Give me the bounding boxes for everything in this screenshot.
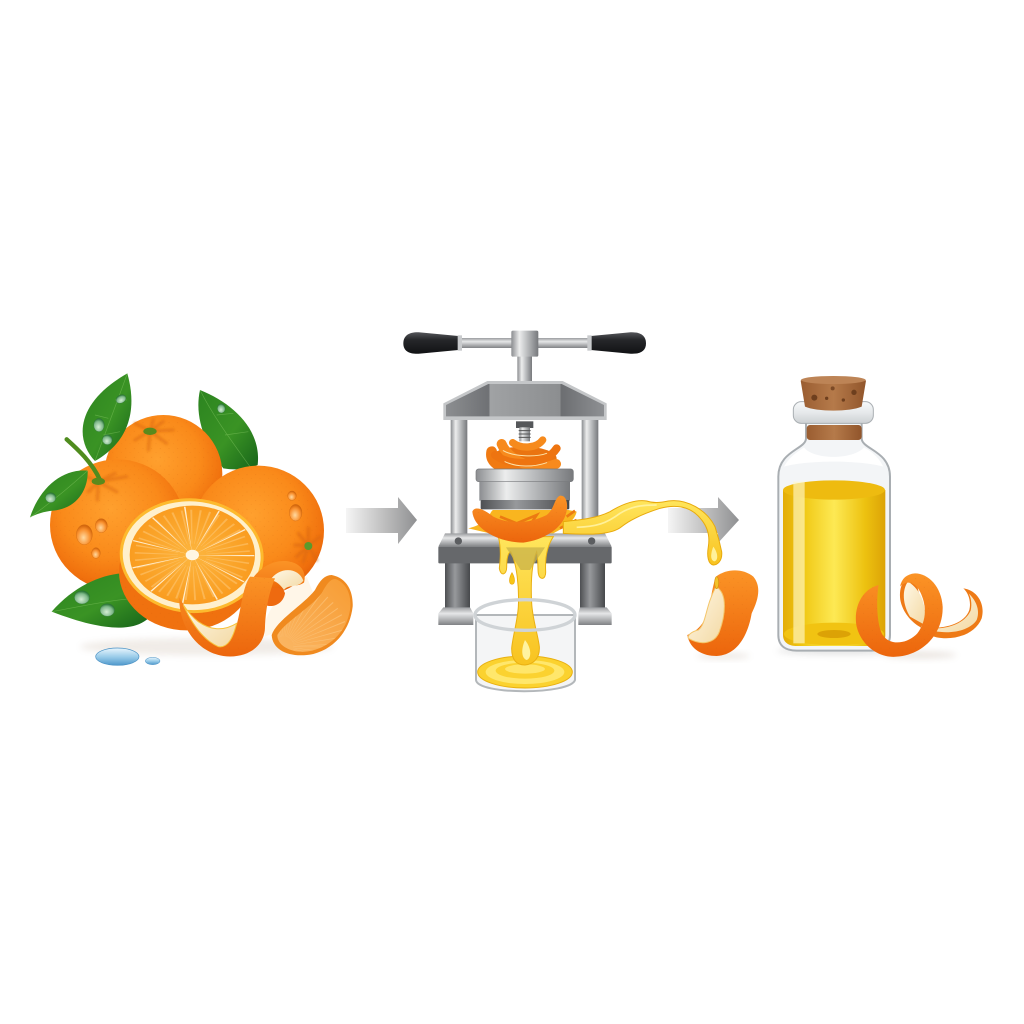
large orange peel xyxy=(472,496,567,543)
panel: fresh oranges xyxy=(30,373,353,685)
glass bottle xyxy=(778,422,890,651)
glass neck rim xyxy=(793,402,873,423)
leaf: top right xyxy=(198,390,258,469)
cork stopper xyxy=(801,376,866,411)
stacked orange peels xyxy=(490,440,557,470)
press cylinder xyxy=(476,469,573,509)
press handle xyxy=(403,331,646,382)
stem xyxy=(67,439,105,485)
glass cup xyxy=(476,615,575,691)
screw xyxy=(516,421,533,441)
arrow: oranges to press xyxy=(346,497,417,544)
press legs and feet xyxy=(438,562,612,625)
pressed pulp xyxy=(468,510,577,533)
bottle shadow xyxy=(777,647,903,655)
press base plate xyxy=(438,533,612,563)
press columns xyxy=(451,418,598,535)
orange: back xyxy=(104,415,222,533)
ground shadow xyxy=(80,638,333,655)
arrow: press to bottle xyxy=(668,497,739,543)
oil stream into cup xyxy=(498,537,553,665)
small peel piece xyxy=(687,570,758,659)
orange: left xyxy=(50,459,185,591)
oil flowing to the right xyxy=(563,501,722,565)
bottle oil xyxy=(783,480,885,646)
leaf: left xyxy=(30,470,88,517)
mandarin segment xyxy=(272,575,353,656)
leaf: bottom xyxy=(52,573,148,628)
panel: cold press machine xyxy=(403,331,722,691)
panel: essential oil bottle xyxy=(687,376,983,659)
orange half slice xyxy=(116,493,267,630)
water drops xyxy=(96,648,160,665)
lower cork in neck xyxy=(807,425,862,440)
orange peel spiral xyxy=(179,561,313,656)
leaf: top left xyxy=(83,373,131,461)
orange: right xyxy=(193,466,324,596)
curled peel beside bottle xyxy=(856,573,983,658)
glass cup rim xyxy=(475,600,575,630)
press head xyxy=(443,381,607,420)
